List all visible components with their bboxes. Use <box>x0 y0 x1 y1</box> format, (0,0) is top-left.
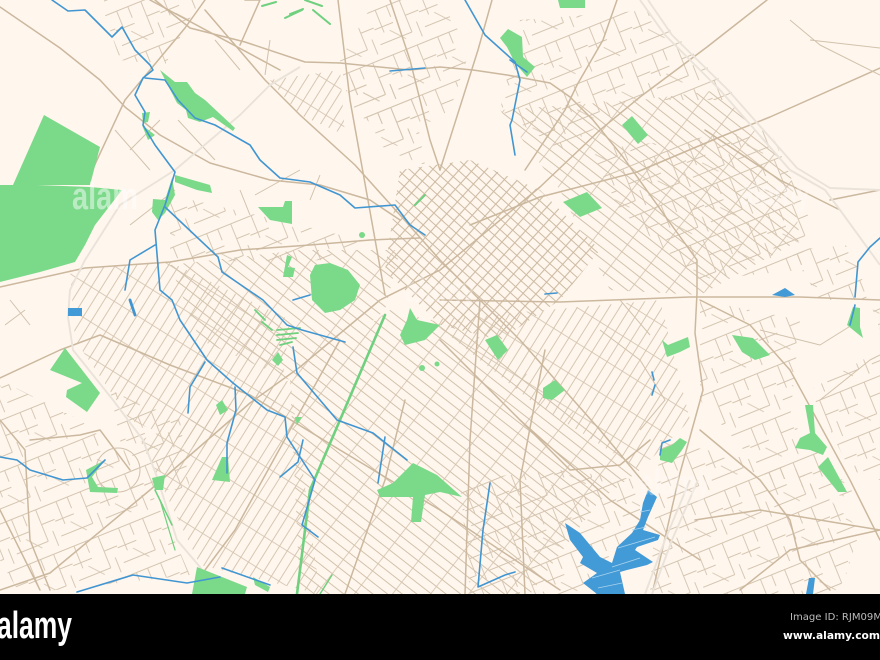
park: large west forest <box>0 185 122 282</box>
secondary roads <box>5 20 880 492</box>
stock watermark: alamy <box>740 172 810 213</box>
stock watermark <box>72 172 810 503</box>
lake and ponds <box>68 288 815 594</box>
footer bar <box>0 594 880 660</box>
image id: Image ID: RJM09M <box>790 612 880 623</box>
stock watermark: alamy <box>405 269 475 310</box>
lake <box>565 490 660 594</box>
park: large north-west forest <box>13 115 100 185</box>
stock watermark: alam <box>72 176 138 218</box>
footer logo: alamy <box>0 605 72 647</box>
green corridors and golf fairways <box>155 0 425 594</box>
lake stripes <box>592 510 655 588</box>
stock watermark: alamy <box>640 462 710 503</box>
website: www.alamy.com <box>783 629 880 642</box>
